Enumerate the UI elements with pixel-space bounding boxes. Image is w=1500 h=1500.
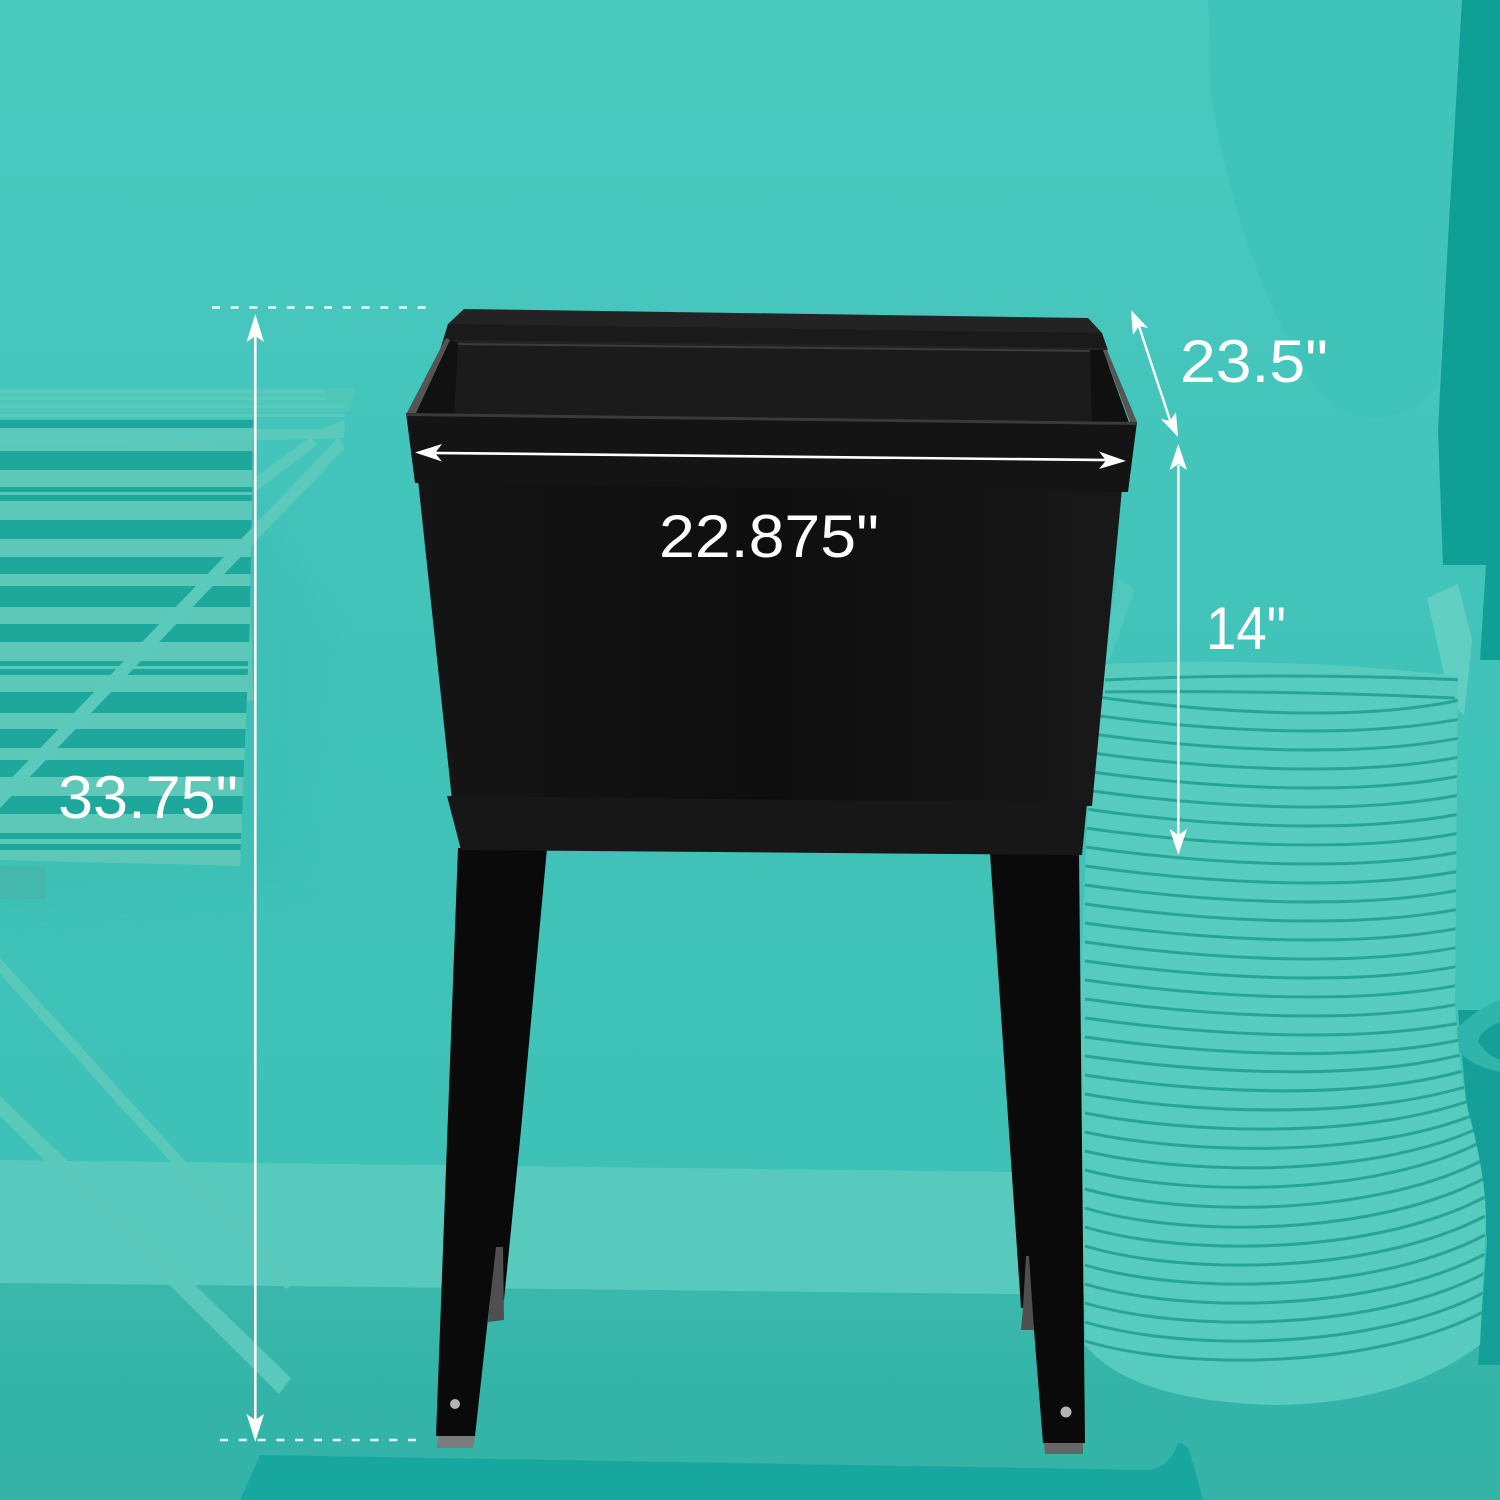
drying rack and towel <box>0 388 355 1394</box>
depth label: 23.5" <box>1180 328 1328 395</box>
rack pole <box>0 1096 291 1394</box>
basin interior back wall <box>420 343 1125 428</box>
height arrow <box>246 314 264 1442</box>
towel back fold <box>240 560 253 705</box>
basin interior side right <box>1090 350 1130 425</box>
rack long leg <box>0 958 295 1289</box>
dimension: depth 23.5 inches <box>1131 310 1328 437</box>
sink body <box>418 480 1122 806</box>
felt foot front left <box>436 1436 475 1448</box>
height label: 33.75" <box>58 764 238 831</box>
screw right <box>1060 1406 1072 1418</box>
screw left <box>450 1399 460 1409</box>
background: floor <box>0 1283 1500 1500</box>
sink front rim <box>406 413 1137 492</box>
leg right <box>990 853 1085 1443</box>
rack top rails <box>0 388 355 446</box>
basin interior side left <box>407 338 458 420</box>
top dashed guide <box>212 306 428 309</box>
background: baseboard <box>0 1160 1100 1295</box>
dimension: basin height 14 inches <box>1170 444 1286 855</box>
basket stripes <box>1085 676 1485 1360</box>
bottom dashed guide <box>220 1439 416 1441</box>
rug <box>240 1443 1203 1500</box>
rack diagonal brace <box>0 438 345 808</box>
striped towel <box>0 420 260 870</box>
rack short brace <box>252 437 318 492</box>
dark hanging cloth <box>1438 0 1500 660</box>
width arrow <box>415 444 1126 469</box>
dimension: width 22.875 inches <box>415 444 1126 570</box>
felt foot back left <box>488 1247 504 1322</box>
depth arrow <box>1131 310 1178 437</box>
ironing board <box>1208 0 1462 418</box>
sink bottom band <box>447 796 1087 855</box>
basket body <box>1070 650 1500 1420</box>
utility sink <box>406 309 1137 1454</box>
width label: 22.875" <box>659 503 879 570</box>
basin height arrow <box>1170 444 1187 855</box>
felt foot back right <box>1021 1256 1034 1330</box>
leg left <box>436 848 547 1436</box>
basket handle right <box>1427 584 1472 716</box>
towel shadow <box>0 470 330 910</box>
rack lower stub <box>0 866 46 899</box>
bucket <box>1455 1000 1500 1365</box>
back splash lip <box>440 309 1108 350</box>
basket handle left <box>1100 578 1135 665</box>
felt foot front right <box>1044 1443 1083 1454</box>
basin height label: 14" <box>1206 595 1286 662</box>
dimension: overall height 33.75 inches <box>58 308 428 1442</box>
laundry basket <box>1070 578 1500 1420</box>
